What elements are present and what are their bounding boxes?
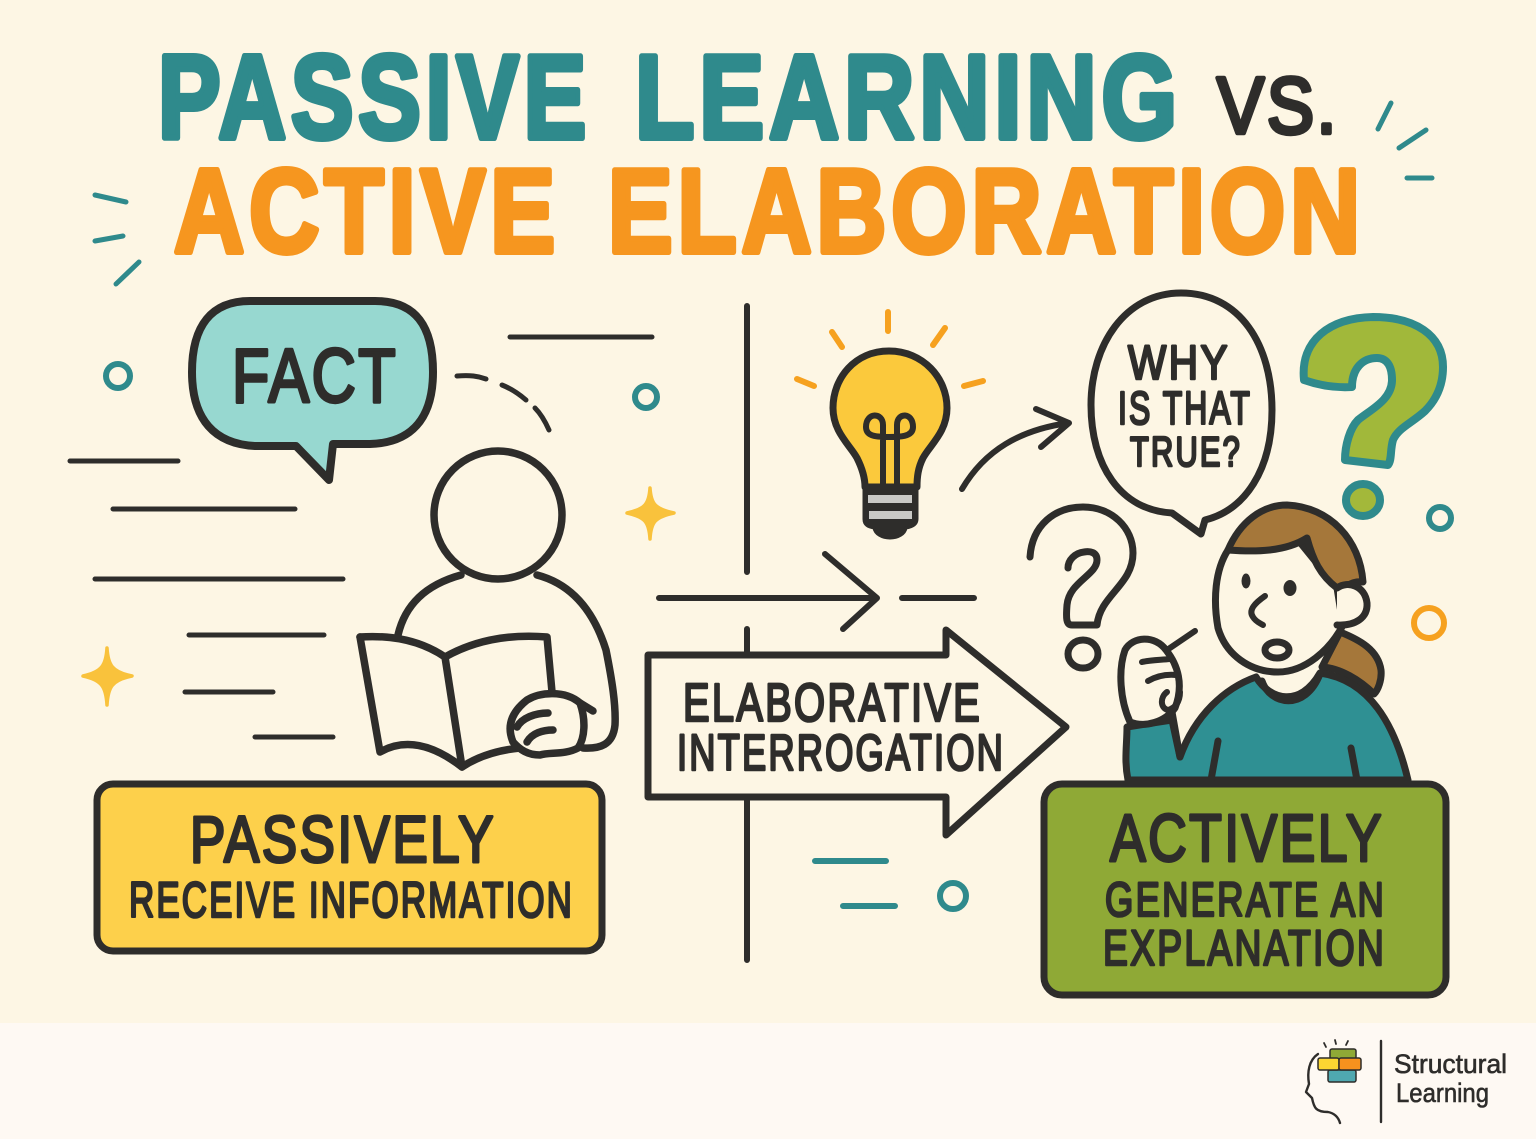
title: ELABORATION (608, 145, 1365, 278)
learner: collar (1262, 674, 1320, 701)
title: ACTIVE (174, 145, 560, 278)
label box: passively (97, 784, 602, 951)
learner: ear (1337, 584, 1367, 625)
label box: actively: ACTIVELY (1110, 801, 1384, 876)
learner: face (1215, 530, 1343, 672)
logo wordmark (1394, 1049, 1507, 1108)
small outline question mark (1030, 507, 1133, 668)
learner: teal sweater (1126, 673, 1408, 780)
big arrow: elaborative interrogation (648, 630, 1066, 835)
sparkle: left of lines (83, 648, 132, 705)
speech bubble: why is that true (1091, 293, 1272, 534)
learner: sweater folds (1211, 741, 1357, 780)
dashed motion arc (457, 376, 549, 430)
logo wordmark: Structural (1394, 1049, 1507, 1079)
learner: open mouth (1265, 642, 1289, 658)
label box: actively (1044, 784, 1446, 995)
label box: actively: EXPLANATION (1103, 920, 1386, 976)
big arrow: elaborative interrogation: INTERROGATION (677, 724, 1005, 781)
learner: nose (1251, 596, 1265, 625)
label box: passively: RECEIVE INFORMATION (129, 872, 574, 928)
big green question mark (1304, 317, 1443, 516)
speed lines: left side (70, 337, 652, 737)
learner: sleeve crease (1172, 712, 1180, 757)
sparkle: right of head (627, 488, 674, 539)
logo wordmark: Learning (1396, 1078, 1489, 1108)
title: LEARNING (635, 31, 1182, 164)
speech bubble: why is that true: WHY (1128, 337, 1230, 390)
speech bubble: why is that true: IS THAT (1118, 382, 1252, 434)
learner: hair (1228, 505, 1363, 588)
speech bubble: fact: FACT (232, 334, 398, 419)
learner: raised hand (1121, 639, 1179, 724)
decorative ticks: title left (95, 195, 139, 284)
title: PASSIVE (158, 31, 591, 164)
big arrow: elaborative interrogation: ELABORATIVE (683, 673, 982, 733)
decorative teal dashes (815, 861, 895, 906)
title (158, 31, 1365, 278)
title: VS. (1217, 61, 1339, 150)
active learner thinking (1121, 505, 1408, 780)
decorative circles (106, 364, 1451, 909)
label box: passively: PASSIVELY (190, 802, 496, 876)
arrow: curved to question (962, 409, 1069, 489)
learner: ponytail (1322, 632, 1381, 694)
center divider line (744, 306, 750, 960)
arrow: thin horizontal (659, 554, 974, 629)
passive learner reading (360, 451, 615, 767)
speech bubble: why is that true: TRUE? (1130, 428, 1242, 475)
logo divider (1380, 1041, 1382, 1122)
logo: structural learning (1306, 1040, 1507, 1123)
speech bubble: fact (192, 301, 433, 480)
lightbulb icon (797, 312, 983, 538)
logo icon: head and blocks (1306, 1040, 1361, 1123)
learner: eyes (1242, 574, 1296, 596)
learner: fingers (1142, 631, 1195, 710)
label box: actively: GENERATE AN (1105, 873, 1386, 927)
orange circle (1414, 608, 1444, 638)
decorative ticks: title right (1378, 103, 1432, 178)
